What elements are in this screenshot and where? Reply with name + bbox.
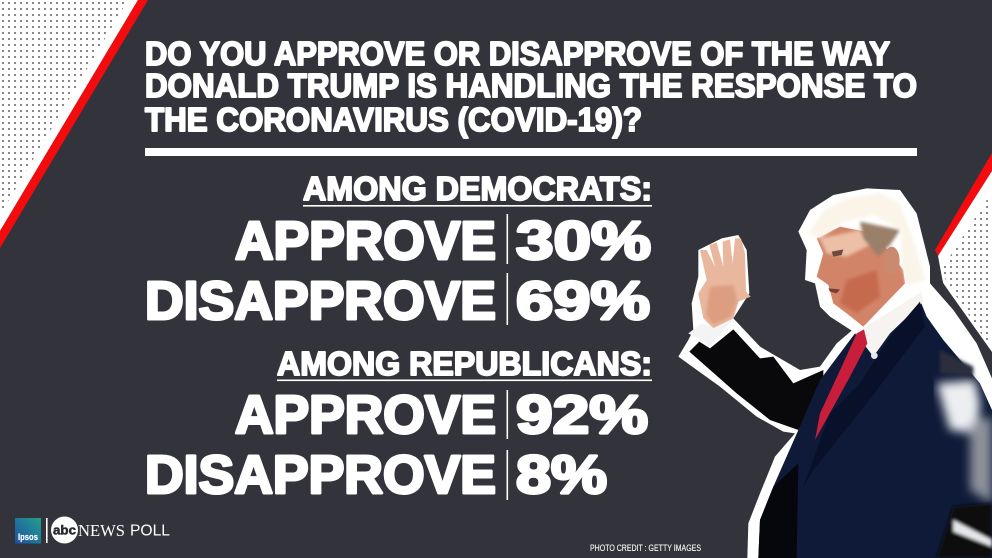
lapel pin xyxy=(871,352,878,359)
row: disapprove 69%: DISAPPROVE xyxy=(145,271,496,331)
row: disapprove 8%: 8% xyxy=(516,445,607,505)
row: approve 30% xyxy=(235,211,651,271)
row: disapprove 69%: 69% xyxy=(516,271,650,331)
row: disapprove 8%: DISAPPROVE xyxy=(145,445,496,505)
row: approve 30%: APPROVE xyxy=(235,211,496,271)
tie xyxy=(815,329,867,440)
heading: among Republicans: AMONG REPUBLICANS: xyxy=(277,345,652,382)
title question: DONALD TRUMP IS HANDLING THE RESPONSE TO xyxy=(145,67,917,104)
suit body xyxy=(758,300,992,558)
top-left halftone corner xyxy=(0,0,148,248)
panel: among Democrats xyxy=(145,170,652,331)
logo: abc News Poll xyxy=(51,516,170,544)
lit shoulder and arm highlights xyxy=(937,380,992,503)
hair xyxy=(808,193,925,285)
cuff xyxy=(688,318,733,347)
logo: abc News Poll: POLL xyxy=(130,522,170,540)
row: approve 92%: 92% xyxy=(516,385,648,445)
shirt and collar xyxy=(863,292,923,357)
sleeve xyxy=(689,329,823,430)
ear xyxy=(884,247,900,275)
photo credit: PHOTO CREDIT : GETTY IMAGES xyxy=(590,543,701,553)
logo: abc News Poll: NEWS xyxy=(78,521,125,540)
logo divider xyxy=(46,518,48,543)
row: approve 92% xyxy=(235,385,648,445)
neck and face xyxy=(817,227,905,327)
figure: cut-out portrait of waving man in suit xyxy=(678,188,992,558)
title question: DO YOU APPROVE OR DISAPPROVE OF THE WAY xyxy=(145,35,890,72)
hand xyxy=(698,238,751,328)
logo: Ipsos xyxy=(15,518,41,544)
heading: among Democrats: AMONG DEMOCRATS: xyxy=(303,170,652,207)
logo: abc News Poll: abc xyxy=(53,522,76,538)
dark shoulder band xyxy=(937,350,992,558)
row: approve 92%: APPROVE xyxy=(235,385,496,445)
title rule xyxy=(145,148,917,156)
row: approve 30%: 30% xyxy=(516,211,651,271)
logo: Ipsos: Ipsos xyxy=(18,532,38,542)
darker suit shadow xyxy=(758,463,798,558)
title question: THE CORONAVIRUS (COVID-19)? xyxy=(145,101,642,138)
title question xyxy=(145,35,917,138)
lapel xyxy=(803,302,925,487)
face shading xyxy=(820,230,880,313)
panel: among Republicans xyxy=(145,345,652,505)
right halftone corner xyxy=(935,153,992,352)
